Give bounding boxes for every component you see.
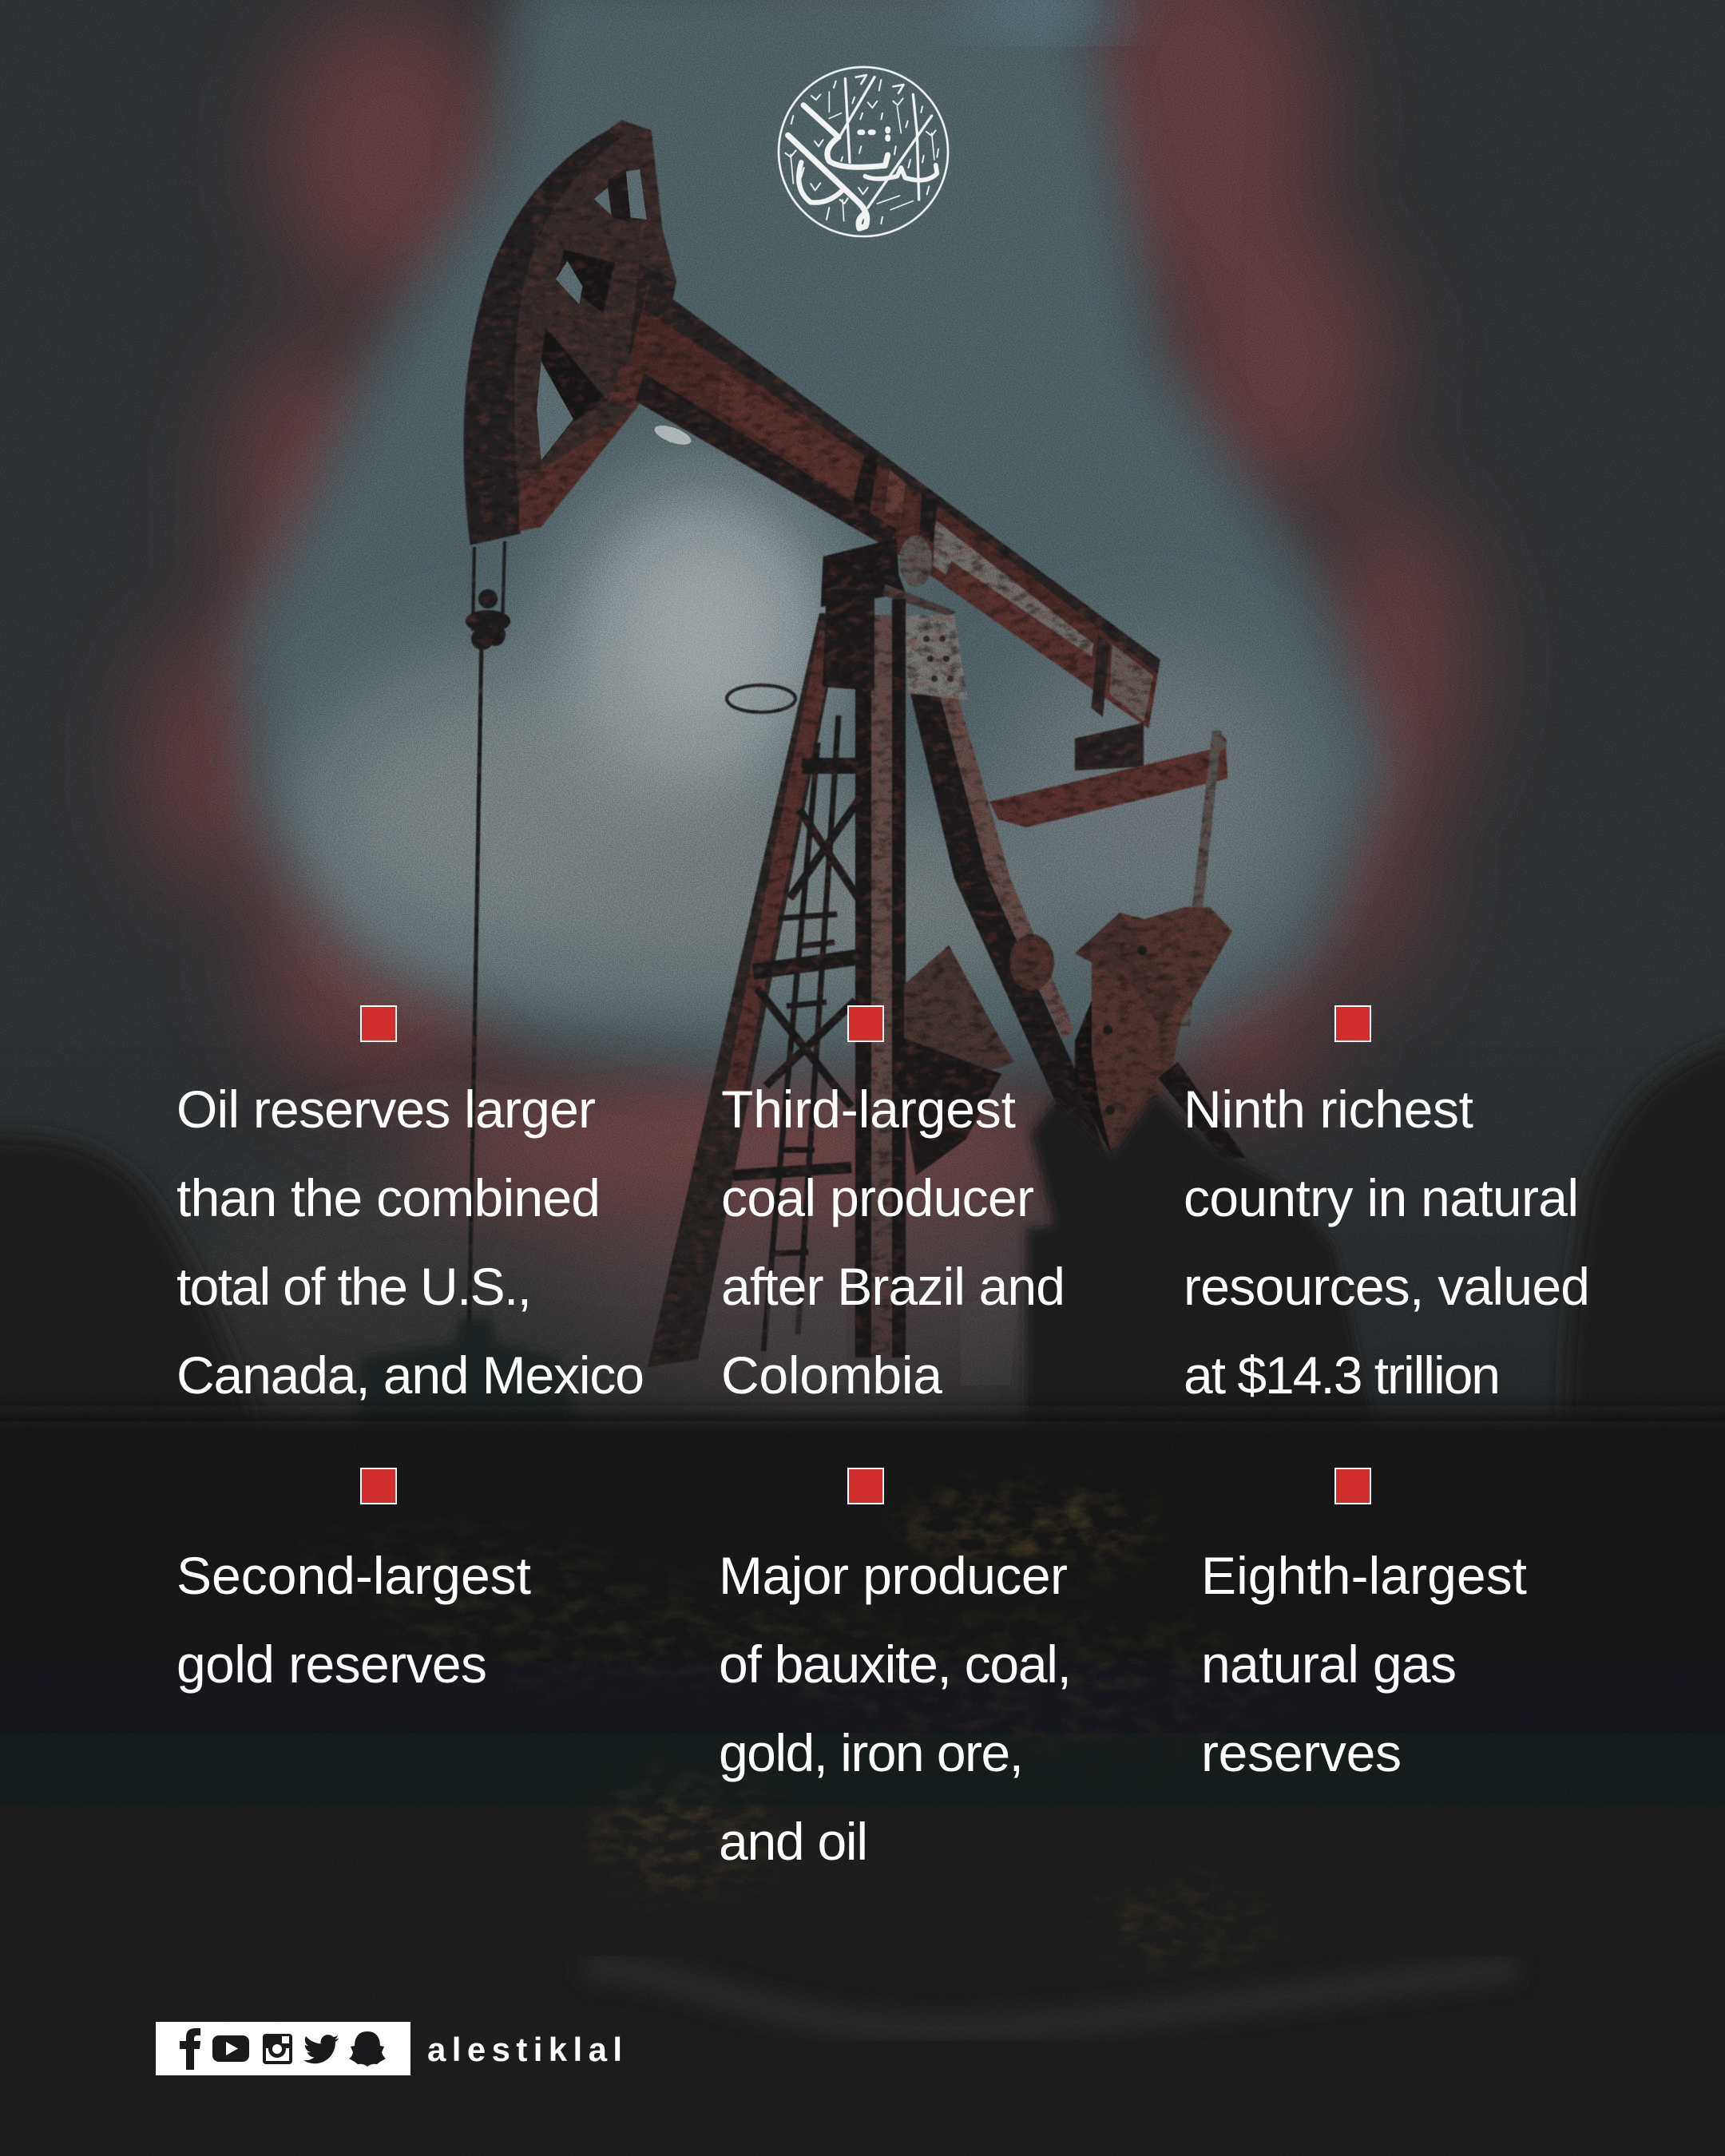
text block: coal producer: after Brazil and (721, 1257, 1065, 1316)
marker: column 1 row 2 (361, 1468, 396, 1504)
counterweights (904, 907, 1246, 1175)
text block: natural gas reserves: Eighth-largest (1201, 1546, 1527, 1605)
icon: youtube (212, 2035, 249, 2062)
marker: column 2 row 1 (848, 1006, 883, 1041)
walking beam (631, 282, 1160, 728)
text block: natural gas reserves: reserves (1201, 1723, 1402, 1782)
footer: social icon bar (156, 2022, 410, 2075)
fence (767, 1302, 1018, 1385)
text block: gold reserves: gold reserves (176, 1635, 487, 1694)
text block: major producer: Major producer (719, 1546, 1068, 1605)
text block: coal producer (721, 1080, 1065, 1405)
text block: natural resources value: country in natural (1184, 1168, 1579, 1227)
icon: twitter (303, 2035, 339, 2063)
horsehead (464, 121, 676, 545)
text block: natural gas reserves: natural gas (1201, 1635, 1457, 1694)
icon: snapchat (349, 2031, 386, 2067)
text block: natural resources value: at $14.3 trillion (1184, 1346, 1501, 1405)
logo: calligraphic emblem (779, 67, 948, 236)
equipment silhouette (1026, 1094, 1374, 1429)
marker: column 3 row 2 (1335, 1468, 1370, 1504)
icon: instagram (263, 2034, 292, 2064)
illustration: oil pump jack (464, 121, 1246, 1381)
text block: oil reserves: Canada, and Mexico (176, 1346, 644, 1405)
text block: natural resources value: resources, valued (1184, 1257, 1590, 1316)
footer: handle: alestiklal (427, 2031, 622, 2068)
text block: coal producer: coal producer (721, 1168, 1034, 1227)
tower frame (648, 587, 1118, 1367)
text block: oil reserves (176, 1080, 644, 1405)
text block: natural resources value (1184, 1080, 1590, 1405)
tower lattice and ladder (733, 715, 867, 1351)
left hump (0, 1134, 256, 1437)
marker: column 3 row 1 (1335, 1006, 1370, 1041)
text block: major producer: gold, iron ore, (719, 1723, 1024, 1782)
text block: major producer (719, 1546, 1072, 1871)
text block: natural gas reserves (1201, 1546, 1527, 1782)
ore lumps (288, 1489, 1294, 1964)
text block: oil reserves: than the combined (176, 1168, 601, 1227)
text block: oil reserves: Oil reserves larger (176, 1080, 596, 1139)
left equipment (359, 1318, 575, 1429)
text block: gold reserves (176, 1546, 531, 1694)
marker: column 1 row 1 (361, 1006, 396, 1041)
icon: facebook (180, 2028, 200, 2070)
text block: major producer: and oil (719, 1812, 868, 1871)
pump rod and hanger (466, 541, 510, 1381)
equalizer and link rod (989, 723, 1227, 1026)
text block: natural resources value: Ninth richest (1184, 1080, 1473, 1139)
text block: major producer: of bauxite, coal, (719, 1635, 1072, 1694)
right hump (1565, 1030, 1725, 1437)
marker: column 2 row 2 (848, 1468, 883, 1504)
misty arc (583, 1968, 1517, 2028)
text block: oil reserves: total of the U.S., (176, 1257, 532, 1316)
text block: coal producer: Third-largest (721, 1080, 1016, 1139)
text block: coal producer: Colombia (721, 1346, 942, 1405)
horsehead windows (537, 169, 693, 460)
text block: gold reserves: Second-largest (176, 1546, 531, 1605)
